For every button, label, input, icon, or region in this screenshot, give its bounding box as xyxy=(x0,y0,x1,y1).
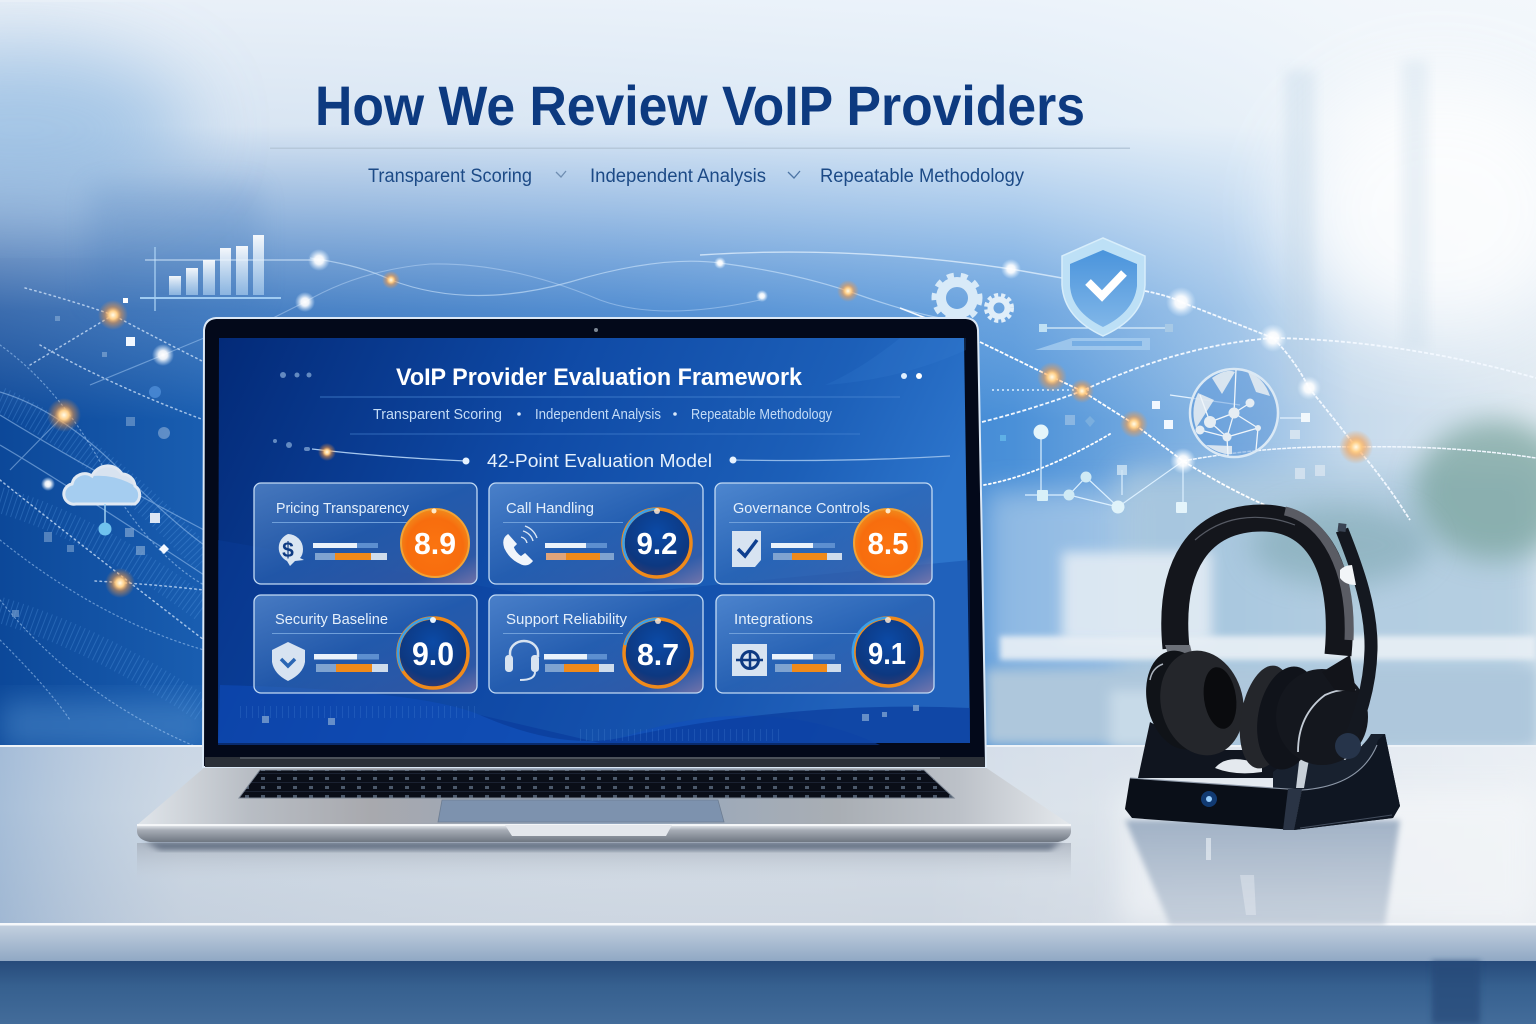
laptop keyboard deck xyxy=(137,767,1071,825)
score 9.2 xyxy=(623,508,691,577)
icon: shield xyxy=(272,642,305,681)
headband xyxy=(1165,511,1349,660)
score 9.1 xyxy=(853,617,922,686)
desk xyxy=(0,745,1536,1024)
score 8.9: 8.9 xyxy=(414,526,456,561)
icon: integration target xyxy=(732,644,767,676)
right ear cup xyxy=(1232,655,1368,774)
card: Pricing Transparency: Pricing Transparency xyxy=(276,501,410,517)
card: Call Handling xyxy=(489,483,703,584)
subtitle row: Transparent Scoring xyxy=(368,166,532,187)
score 8.7: 8.7 xyxy=(637,637,679,672)
score 9.0: 9.0 xyxy=(412,636,454,672)
score 8.5: 8.5 xyxy=(868,526,908,561)
icon: security shield with check xyxy=(1035,238,1173,350)
microphone boom xyxy=(1335,527,1371,759)
headset on charging dock xyxy=(1125,511,1400,830)
right nodes xyxy=(295,249,1373,514)
card: Integrations xyxy=(716,595,934,693)
icon: globe network xyxy=(1190,369,1278,457)
screen subheading: Repeatable Methodology xyxy=(691,407,833,423)
keyboard xyxy=(239,770,954,798)
laptop lid and bezel xyxy=(203,318,986,767)
card: Integrations: Integrations xyxy=(734,612,813,628)
subtitle row xyxy=(368,166,1024,187)
icon: gears xyxy=(934,275,1012,321)
network lines and nodes: top and right xyxy=(265,252,1536,520)
screen subheading: Independent Analysis xyxy=(535,407,661,423)
title divider xyxy=(270,148,1130,149)
icon: cloud xyxy=(64,466,140,536)
screen subheading xyxy=(373,407,833,423)
card: Support Reliability xyxy=(489,595,703,693)
laptop shadow xyxy=(145,842,1062,850)
card: Support Reliability: Support Reliability xyxy=(506,612,628,628)
card: Call Handling: Call Handling xyxy=(506,501,594,517)
score 8.5 xyxy=(854,508,922,577)
left ear cup xyxy=(1137,642,1255,764)
card: Security Baseline: Security Baseline xyxy=(275,612,388,628)
screen subheading: Transparent Scoring xyxy=(373,407,502,423)
model heading with connector lines: 42-Point Evaluation Model xyxy=(487,450,712,471)
screen dots xyxy=(262,372,919,725)
headset reflection on desk xyxy=(1125,820,1400,925)
background: blurred office and blue gradient xyxy=(0,0,1536,760)
score 9.0 xyxy=(398,617,468,688)
score 9.1: 9.1 xyxy=(868,636,906,671)
icon: checklist document xyxy=(732,531,761,567)
chart icon: rising bars xyxy=(140,235,318,311)
icon: headset xyxy=(505,641,539,680)
title: How We Review VoIP Providers xyxy=(315,74,1085,137)
model heading with connector lines xyxy=(312,443,950,471)
laptop xyxy=(137,318,1071,850)
left nodes xyxy=(12,298,174,617)
icon: phone xyxy=(504,526,537,565)
laptop reflection on desk xyxy=(137,843,1071,883)
network lines and nodes: left xyxy=(0,288,204,750)
card: Governance Controls xyxy=(715,483,932,584)
laptop front lip xyxy=(137,825,1071,842)
trackpad xyxy=(438,800,724,822)
subtitle row: Independent Analysis xyxy=(590,166,766,187)
dock xyxy=(1125,722,1400,830)
score 9.2: 9.2 xyxy=(636,526,678,561)
screen heading: VoIP Provider Evaluation Framework xyxy=(396,364,802,391)
score 8.7 xyxy=(624,618,692,687)
card: Security Baseline xyxy=(254,595,477,693)
card: Pricing Transparency xyxy=(254,483,477,584)
subtitle row: Repeatable Methodology xyxy=(820,166,1024,187)
icon: dollar bubble xyxy=(279,534,304,566)
laptop screen xyxy=(218,338,970,745)
icon: dollar bubble: $ xyxy=(282,539,294,562)
camera xyxy=(594,328,598,332)
score 8.9 xyxy=(401,508,469,577)
card: Governance Controls: Governance Controls xyxy=(733,501,870,517)
laptop notch xyxy=(505,825,672,836)
